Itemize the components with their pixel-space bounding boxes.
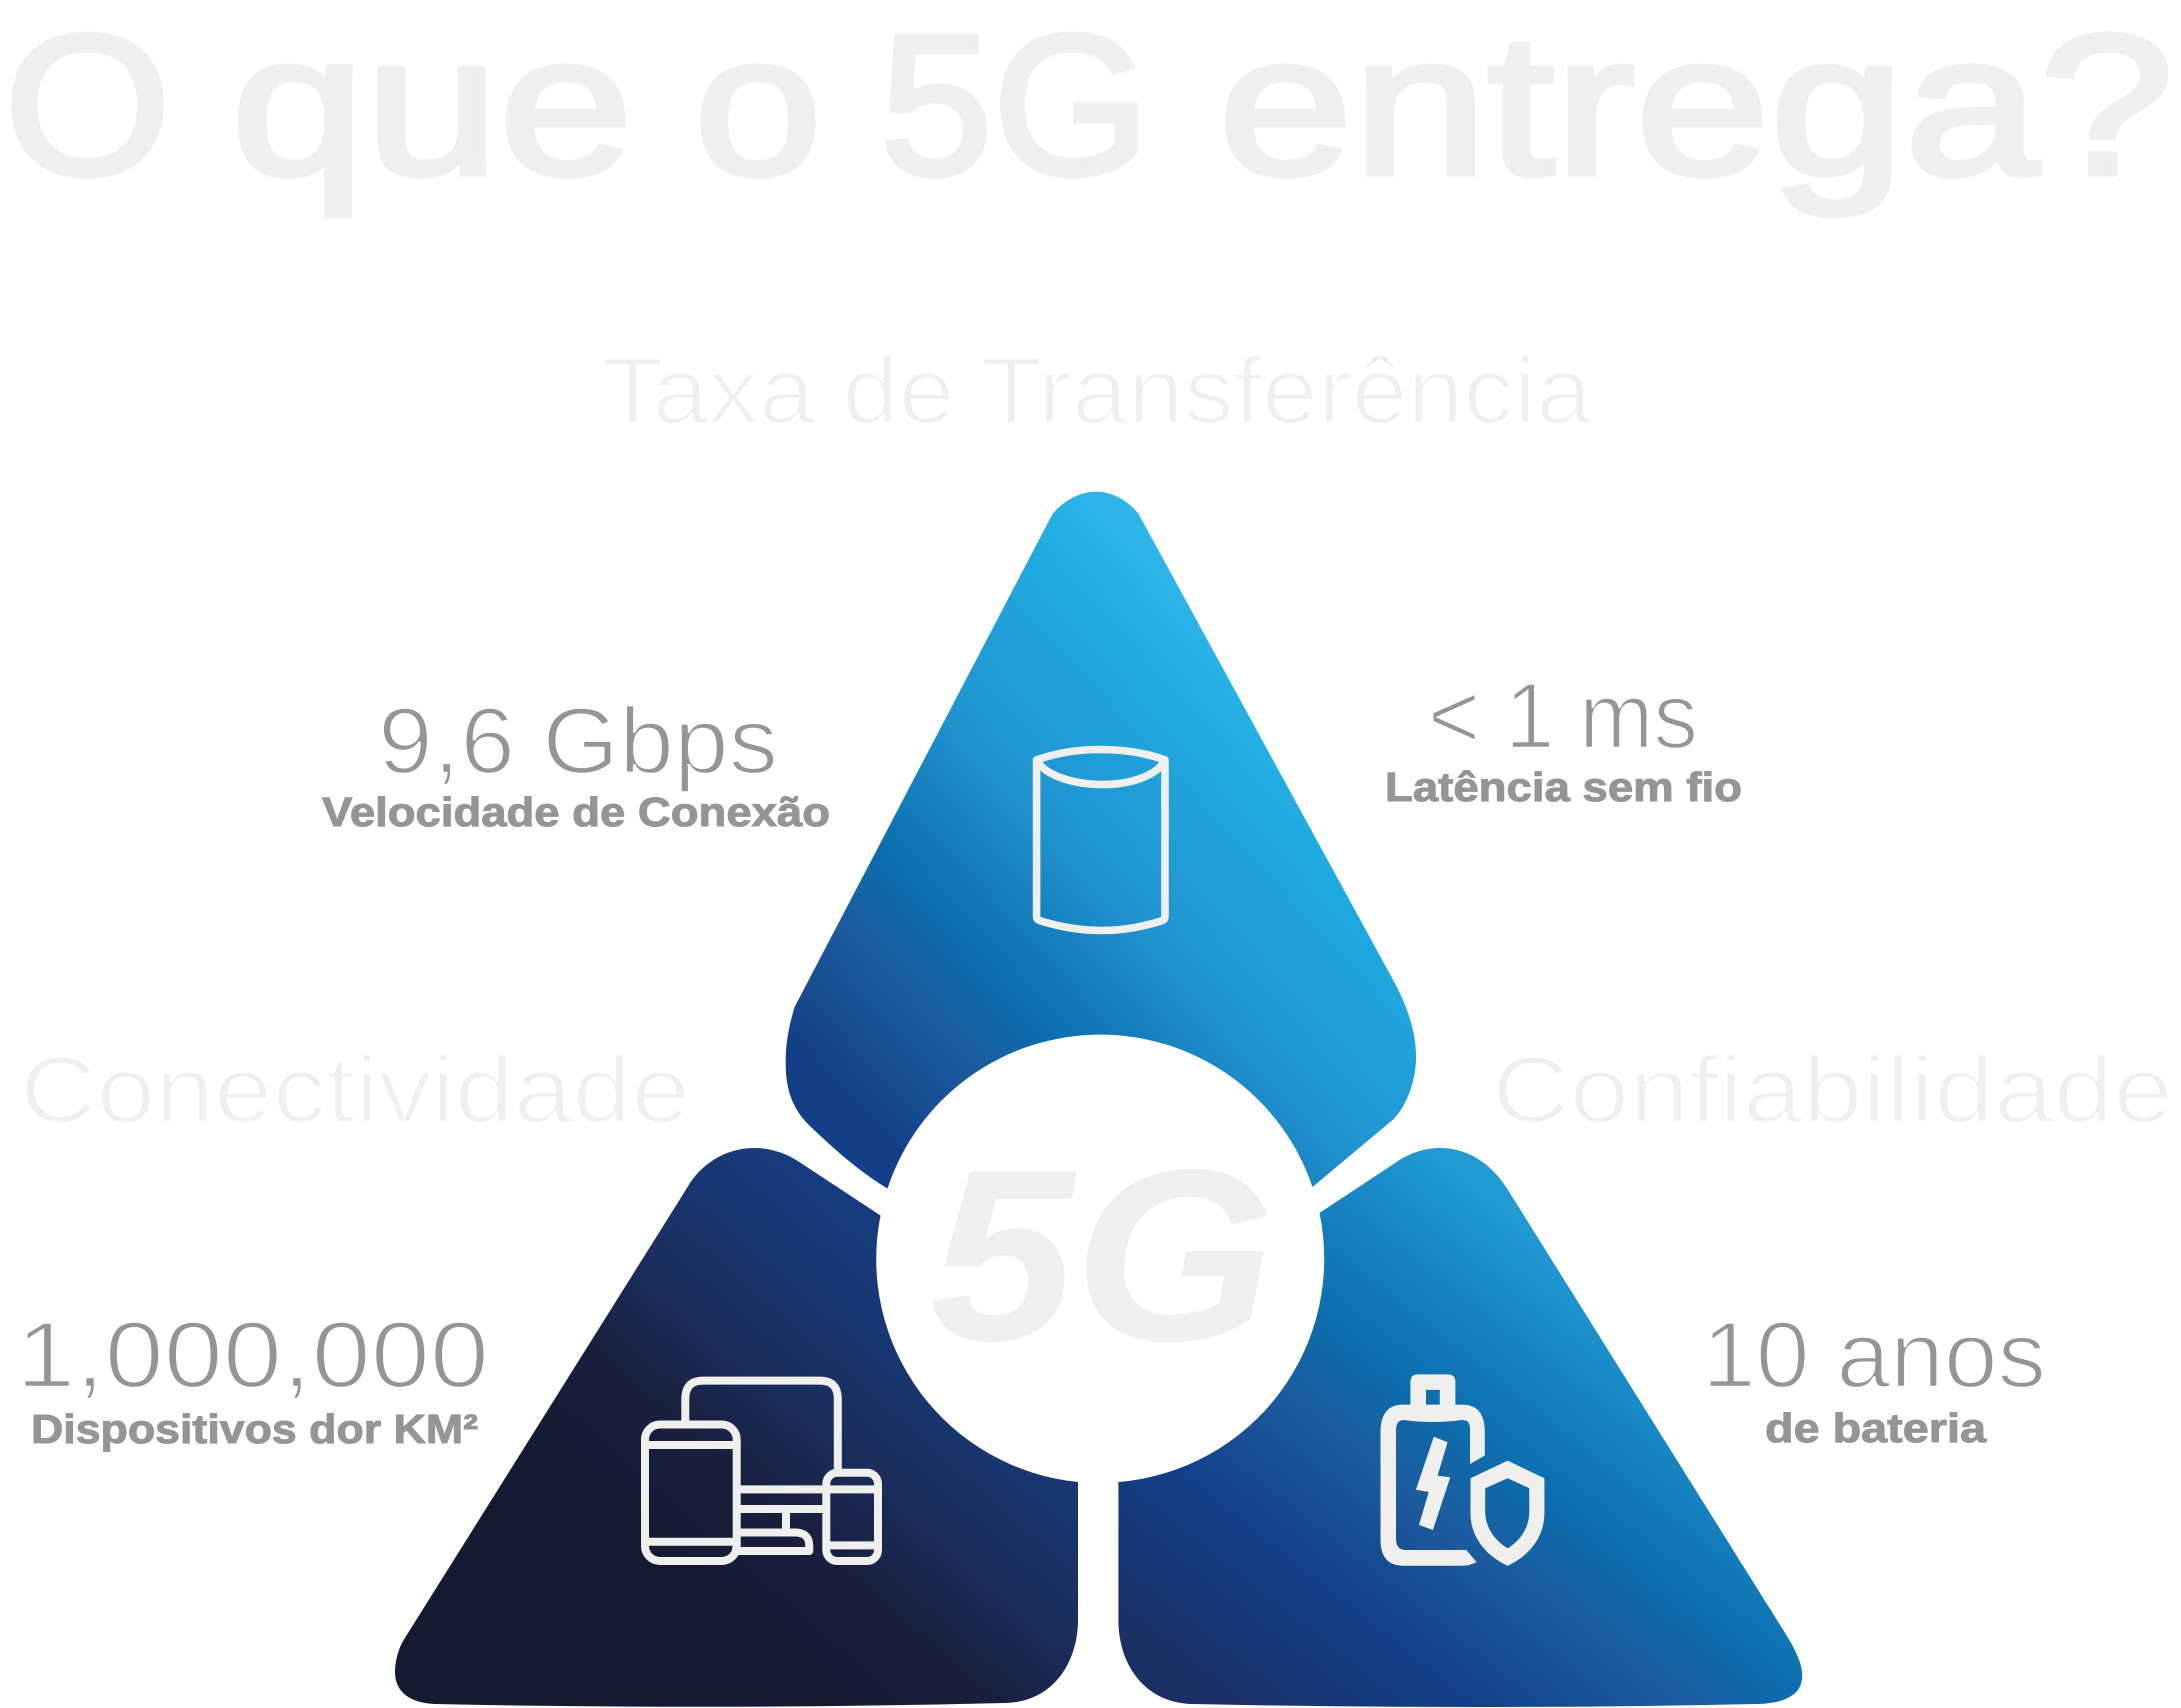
stat: anos de bateria: 10 anos bbox=[1702, 1302, 2046, 1407]
stat: velocidade de conexão: 9,6 Gbps bbox=[378, 688, 778, 793]
stat: latência sem fio bbox=[1385, 663, 1742, 810]
center label: 5G: 5G bbox=[930, 1118, 1275, 1392]
icon: devices bbox=[645, 1381, 878, 1561]
stat: latência sem fio: < 1 ms bbox=[1428, 663, 1698, 768]
stat: dispositivos por km2 bbox=[16, 1302, 489, 1452]
panel: left segment bbox=[395, 1148, 1078, 1707]
title: O bbox=[4, 0, 171, 217]
title: o bbox=[694, 0, 822, 217]
heading: Conectividade: Conectividade bbox=[20, 1037, 690, 1142]
stat: dispositivos por km2: Dispositivos dor KM² bbox=[31, 1406, 478, 1452]
stat: anos de bateria bbox=[1702, 1302, 2046, 1451]
stat: anos de bateria: de bateria bbox=[1765, 1405, 1987, 1451]
heading: Taxa de Transferência: Taxa de Transferência bbox=[602, 338, 1593, 443]
panel: right segment bbox=[1118, 1148, 1802, 1707]
title: 5G bbox=[880, 0, 1150, 217]
stat: velocidade de conexão: Velocidade de Conexão bbox=[322, 789, 830, 835]
icon: cylinder bbox=[1037, 750, 1165, 930]
stat: latência sem fio: Latência sem fio bbox=[1385, 764, 1742, 810]
panel: top segment bbox=[786, 492, 1416, 1189]
icon: battery and shield bbox=[1380, 1374, 1544, 1566]
title: que bbox=[231, 0, 633, 217]
stat: velocidade de conexão bbox=[322, 688, 830, 835]
title bbox=[4, 0, 2174, 217]
title: entrega? bbox=[1218, 0, 2174, 217]
heading: Confiabilidade: Confiabilidade bbox=[1492, 1037, 2173, 1142]
stat: dispositivos por km2: 1,000,000 bbox=[16, 1302, 489, 1407]
